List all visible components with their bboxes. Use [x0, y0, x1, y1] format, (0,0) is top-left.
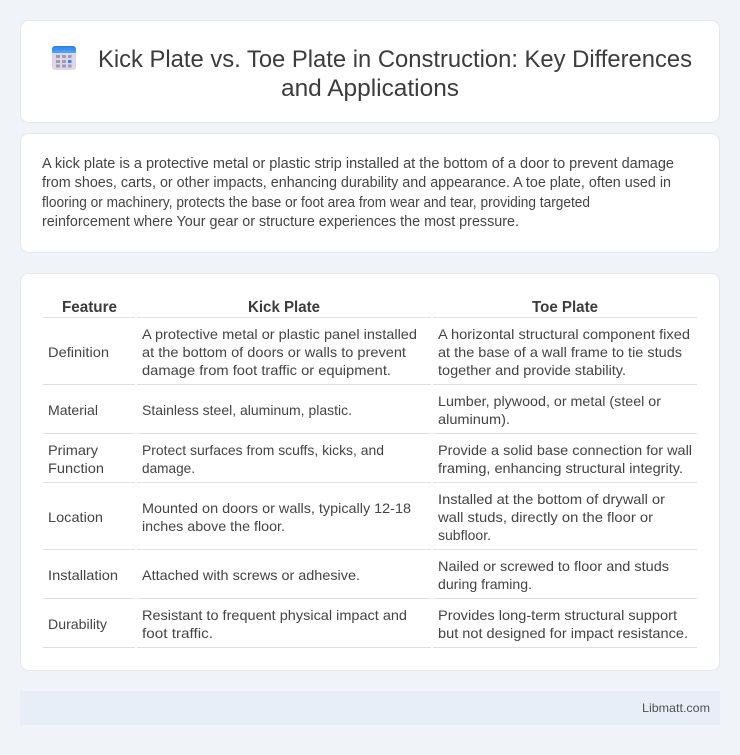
row: location: subfloor.	[438, 527, 491, 543]
row: primary function: Provide a solid base connection for wall	[438, 442, 692, 458]
panel: intro paragraph	[20, 134, 720, 252]
title	[98, 46, 692, 102]
row: durability: Resistant to frequent physical impact and	[142, 607, 407, 623]
text block: intro: reinforcement where Your gear or structure experiences the most pressure.	[42, 214, 519, 230]
text block: intro: A kick plate is a protective metal or plastic strip installed at the bottom of a door to prevent damage	[42, 156, 674, 172]
panel: header	[20, 20, 720, 122]
row: material: Material	[48, 402, 98, 418]
row: primary function: Function	[48, 460, 104, 476]
row: installation: during framing.	[438, 576, 532, 592]
footer: Libmatt.com	[642, 701, 710, 715]
row: material: Lumber, plywood, or metal (steel or	[438, 393, 661, 409]
row: installation: Attached with screws or adhesive.	[142, 567, 360, 583]
row: primary function: Primary	[48, 442, 98, 458]
row: definition: A protective metal or plastic panel installed	[142, 326, 417, 342]
row: location: wall studs, directly on the floor or	[437, 509, 653, 525]
table header row: Kick Plate	[248, 299, 320, 316]
title: and Applications	[281, 75, 459, 102]
panel: comparison table	[20, 274, 720, 670]
row: definition: damage from foot traffic or equipment.	[142, 362, 391, 378]
row: definition: Definition	[48, 344, 109, 360]
text block: intro: flooring or machinery, protects the base or foot area from wear and tear, providing targeted	[42, 195, 590, 211]
row: durability: but not designed for impact resistance.	[438, 625, 688, 641]
row: primary function	[48, 442, 692, 476]
row: location	[48, 491, 665, 543]
row: durability: foot traffic.	[142, 625, 213, 641]
row: definition: at the base of a wall frame to tie studs	[438, 344, 682, 360]
table header row	[62, 299, 598, 316]
row: primary function: damage.	[142, 460, 195, 476]
table header row: Feature	[62, 299, 117, 316]
row: installation: Nailed or screwed to floor and studs	[438, 558, 669, 574]
row: material: aluminum).	[438, 411, 510, 427]
row: primary function: framing, enhancing structural integrity.	[438, 460, 683, 476]
text block: intro	[42, 156, 674, 230]
text block: intro: from shoes, carts, or other impacts, enhancing durability and appearance. A toe plate, often used in	[42, 175, 671, 191]
icon: calendar	[52, 46, 76, 70]
row: definition	[48, 326, 690, 378]
row: installation: Installation	[48, 567, 118, 583]
title: Kick Plate vs. Toe Plate in Construction: Key Differences	[98, 46, 692, 73]
row: durability: Provides long-term structural support	[438, 607, 677, 623]
row: primary function: Protect surfaces from scuffs, kicks, and	[142, 442, 384, 458]
row: definition: A horizontal structural component fixed	[438, 326, 690, 342]
row: location: Mounted on doors or walls, typically 12-18	[142, 500, 411, 516]
row: material: Stainless steel, aluminum, plastic.	[142, 402, 352, 418]
row: installation	[48, 558, 669, 592]
footer	[20, 691, 720, 725]
row: durability	[48, 607, 688, 641]
row: material	[48, 393, 661, 427]
table header row: Toe Plate	[532, 299, 598, 316]
row: location: Installed at the bottom of drywall or	[438, 491, 665, 507]
row: durability: Durability	[48, 616, 107, 632]
row: location: inches above the floor.	[142, 518, 285, 534]
row: definition: together and provide stability.	[438, 362, 626, 378]
row: definition: at the bottom of doors or walls to prevent	[142, 344, 406, 360]
row: location: Location	[48, 509, 103, 525]
